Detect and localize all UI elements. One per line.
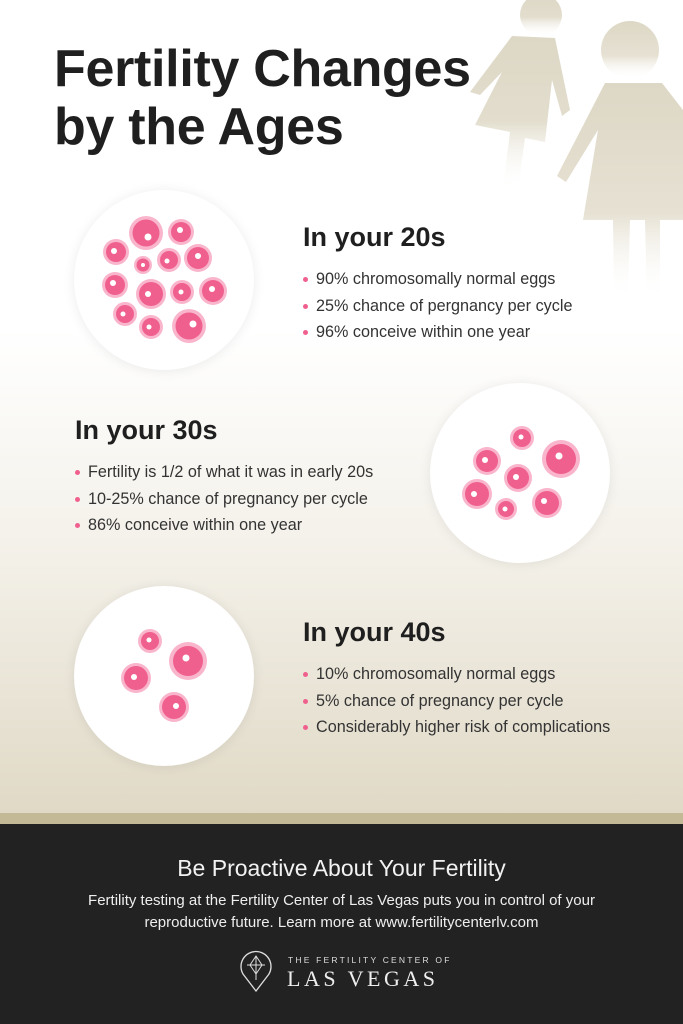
text: 20s: 96% conceive within one year xyxy=(316,323,530,341)
logo: LAS VEGAS xyxy=(287,966,439,991)
text: 40s: 5% chance of pregnancy per cycle xyxy=(316,692,563,710)
text: 20s: 90% chromosomally normal eggs xyxy=(316,270,555,288)
circle: 30s eggs xyxy=(430,383,610,563)
text: 30s: Fertility is 1/2 of what it was in early 20s xyxy=(88,463,373,481)
circle: 40s eggs xyxy=(74,586,254,766)
text: 30s: In your 30s xyxy=(75,415,218,445)
footer text: Fertility testing at the Fertility Center of Las Vegas puts you in control of your xyxy=(88,892,595,909)
footer xyxy=(0,824,683,1024)
silhouettes xyxy=(470,0,683,262)
title xyxy=(54,40,471,156)
text: 40s xyxy=(303,617,610,736)
text: 20s xyxy=(303,222,572,341)
footer heading: Be Proactive About Your Fertility xyxy=(177,855,506,881)
text: 40s: Considerably higher risk of complications xyxy=(316,718,610,736)
text: 20s: In your 20s xyxy=(303,222,446,252)
title: Fertility Changes xyxy=(54,40,471,98)
logo: THE FERTILITY CENTER OF xyxy=(288,955,452,965)
text: 40s: In your 40s xyxy=(303,617,446,647)
circle: 20s eggs xyxy=(74,190,254,370)
footer text: reproductive future. Learn more at www.fertilitycenterlv.com xyxy=(144,914,539,931)
text: 30s xyxy=(75,415,373,534)
text: 30s: 10-25% chance of pregnancy per cycle xyxy=(88,490,368,508)
text: 30s: 86% conceive within one year xyxy=(88,516,302,534)
logo xyxy=(240,950,452,992)
text: 20s: 25% chance of pergnancy per cycle xyxy=(316,296,572,314)
text: 40s: 10% chromosomally normal eggs xyxy=(316,665,555,683)
title: by the Ages xyxy=(54,98,344,156)
footer strip xyxy=(0,813,683,824)
footer text xyxy=(88,892,595,931)
